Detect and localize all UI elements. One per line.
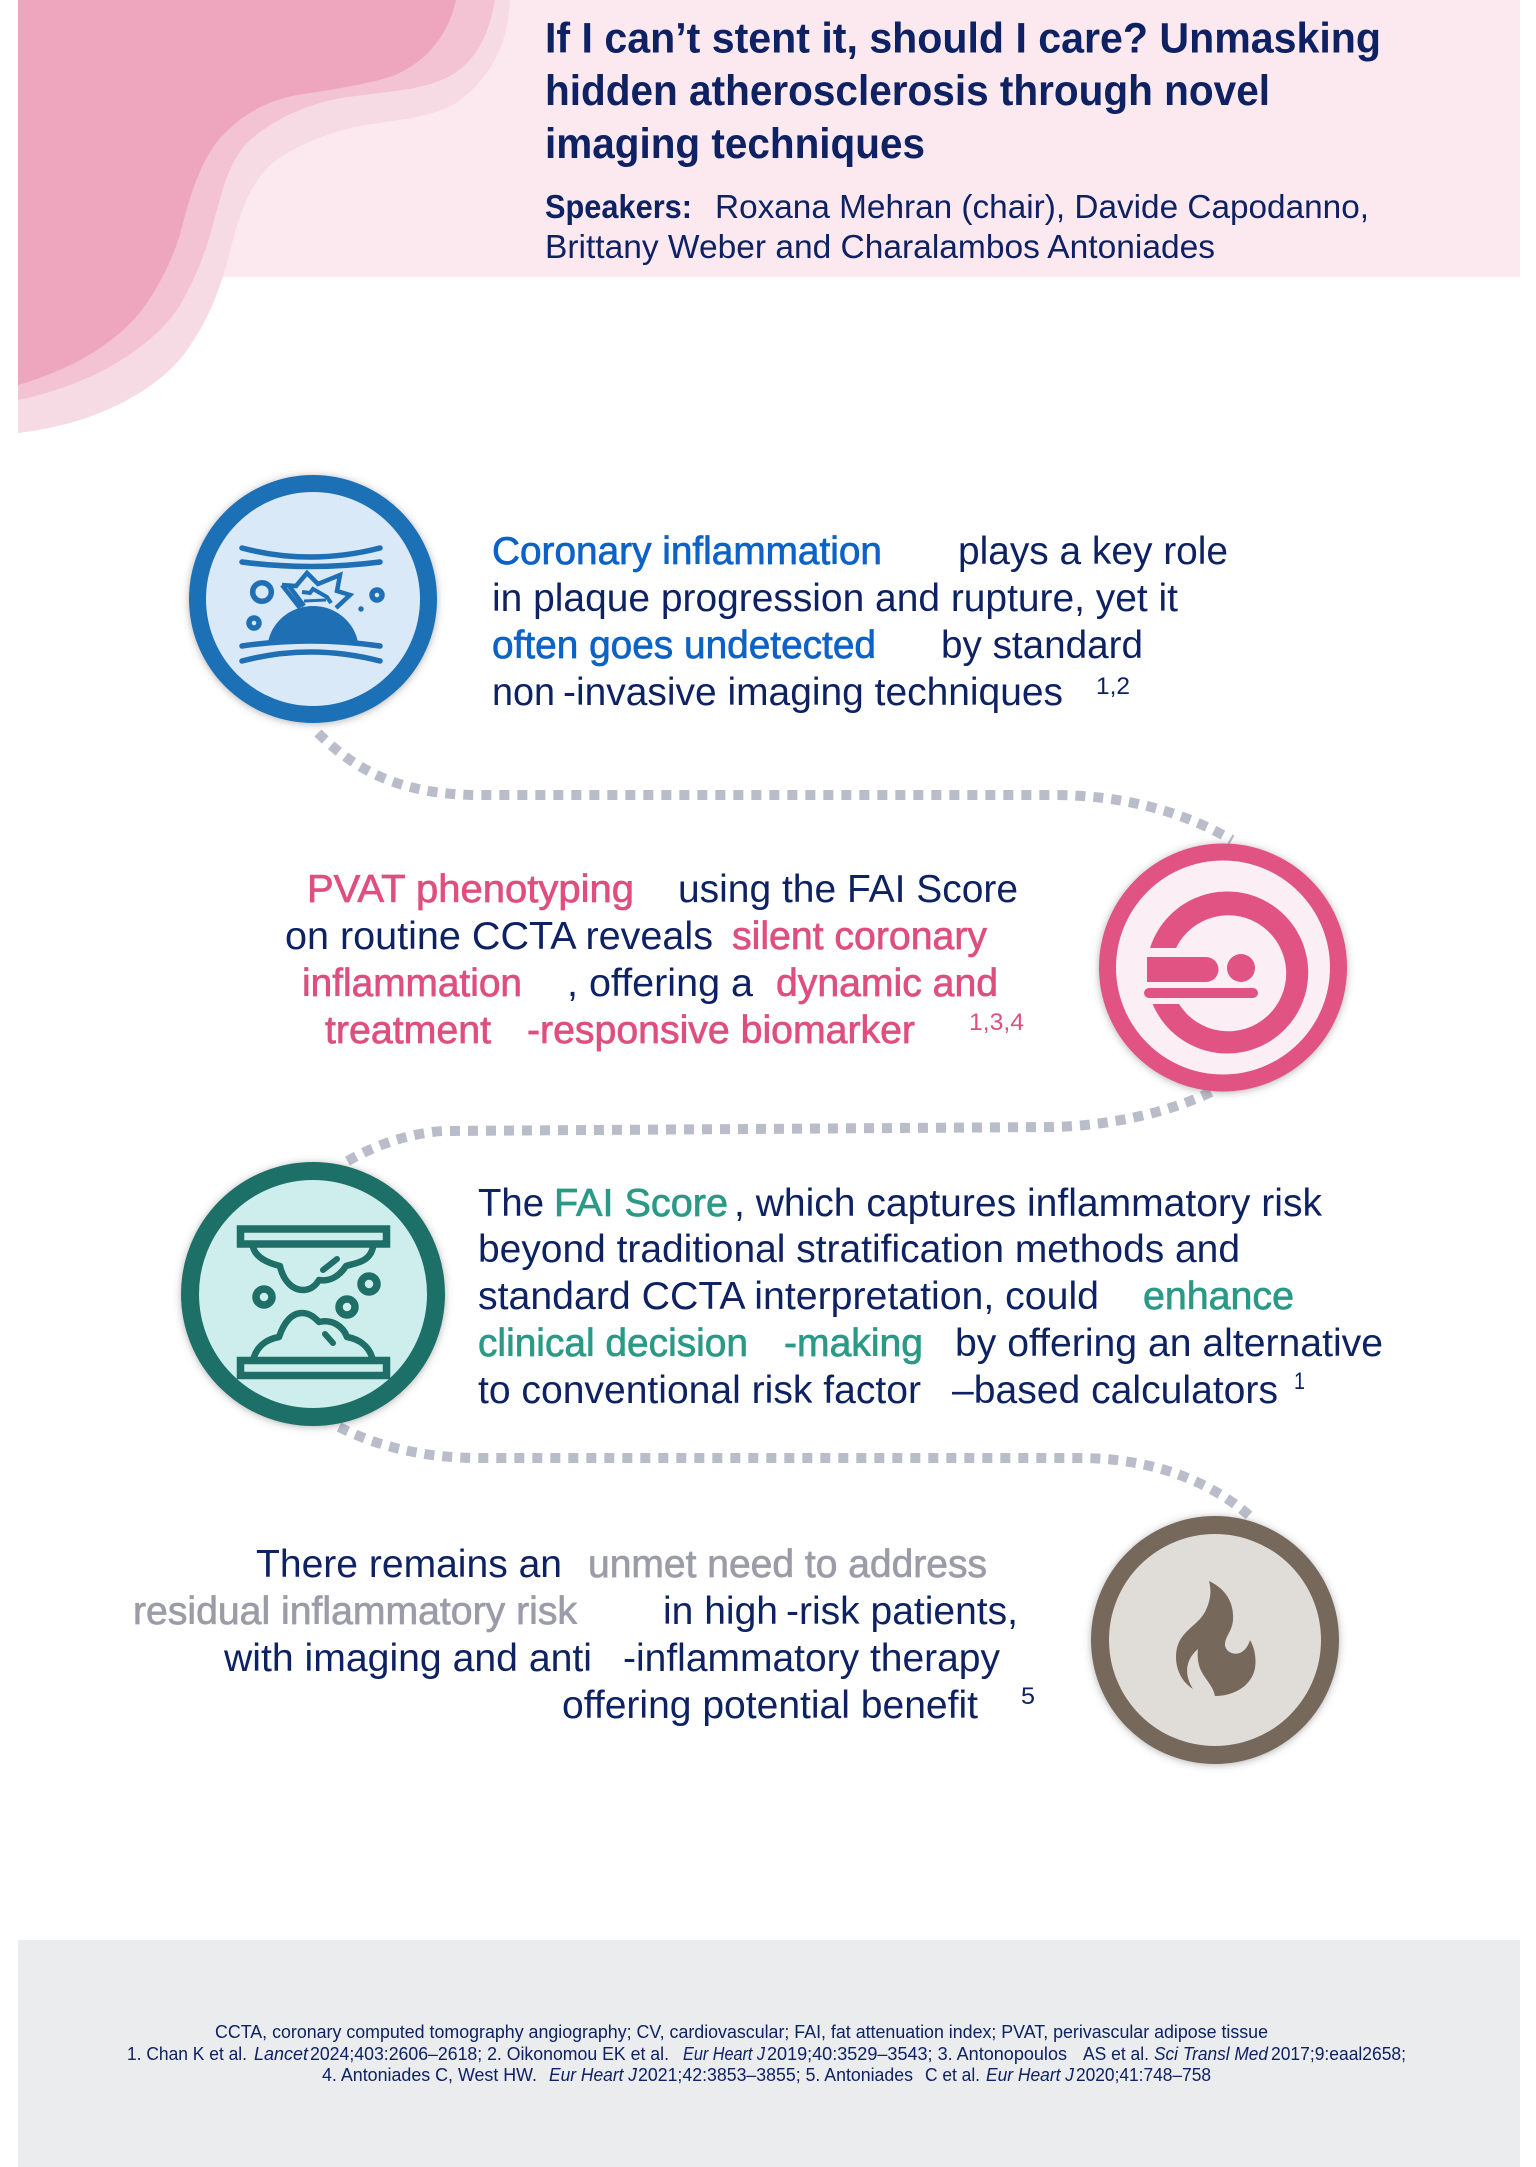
text block: unmet need: -risk patients, — [786, 1590, 1018, 1633]
text block: PVAT phenotyping: 1,3,4 — [969, 1009, 1024, 1036]
text block: unmet need: in high — [663, 1590, 778, 1633]
dashed connector 2 to 3 — [346, 1092, 1211, 1162]
text block: unmet need — [133, 1543, 1035, 1727]
text block: FAI Score: –based calculators — [952, 1369, 1278, 1412]
speakers: Speakers: — [545, 188, 692, 225]
footer abbreviations and references: AS et al. — [1083, 2044, 1149, 2064]
text block: coronary inflammation — [492, 530, 1228, 714]
icon: calcified plaque hourglass — [190, 1171, 436, 1417]
footer abbreviations and references: 2019;40:3529–3543; 3. Antonopoulos — [767, 2044, 1067, 2064]
footer abbreviations and references: 2017;9:eaal2658; — [1271, 2044, 1406, 2064]
text block: unmet need: offering potential benefit — [562, 1684, 978, 1727]
title: imaging techniques — [545, 120, 925, 168]
text block: PVAT phenotyping — [285, 868, 1024, 1052]
dashed connector 1 to 2 — [318, 733, 1232, 840]
text block: unmet need: There remains an — [256, 1543, 562, 1586]
footer abbreviations and references: 1. Chan K et al. — [127, 2044, 247, 2064]
icon: coronary plaque rupture — [198, 484, 428, 714]
icon: CT scanner — [1108, 852, 1338, 1083]
footer abbreviations and references — [127, 2022, 1406, 2085]
text block: FAI Score — [478, 1182, 1383, 1412]
text block: PVAT phenotyping: -responsive biomarker — [527, 1009, 915, 1052]
footer abbreviations and references: Lancet — [254, 2044, 309, 2064]
text block: FAI Score: enhance — [1143, 1275, 1294, 1318]
text block: PVAT phenotyping: treatment — [325, 1009, 491, 1052]
title: hidden atherosclerosis through novel — [545, 67, 1270, 115]
footer abbreviations and references: CCTA, coronary computed tomography angiography; CV, cardiovascular; FAI, fat attenuation index; PVAT, perivascular adipose tissue — [215, 2022, 1268, 2042]
text block: PVAT phenotyping: , offering a — [567, 962, 753, 1005]
footer abbreviations and references: Eur Heart J — [986, 2065, 1075, 2085]
footer abbreviations and references: 2021;42:3853–3855; 5. Antoniades — [638, 2065, 913, 2085]
footer abbreviations and references: Eur Heart J — [549, 2065, 638, 2085]
footer band — [18, 1940, 1520, 2167]
text block: unmet need: residual inflammatory risk — [133, 1590, 577, 1633]
text block: coronary inflammation: non — [492, 671, 555, 714]
decorative pink waves — [18, 0, 510, 433]
footer abbreviations and references: Sci Transl Med — [1154, 2044, 1269, 2064]
speakers: Roxana Mehran (chair), Davide Capodanno, — [715, 188, 1369, 225]
text block: PVAT phenotyping: inflammation — [302, 962, 522, 1005]
text block: coronary inflammation: in plaque progression and rupture, yet it — [492, 577, 1178, 620]
text block: FAI Score: , which captures inflammatory risk — [734, 1182, 1322, 1225]
icon: flame — [1100, 1525, 1330, 1755]
text block: coronary inflammation: Coronary inflammation — [492, 530, 882, 573]
text block: coronary inflammation: often goes undetected — [492, 624, 876, 667]
footer abbreviations and references: 4. Antoniades C, West HW. — [322, 2065, 537, 2085]
text block: FAI Score: 1 — [1294, 1368, 1305, 1395]
header band — [18, 0, 1520, 277]
title — [545, 14, 1381, 168]
text block: PVAT phenotyping: on routine CCTA reveals — [285, 915, 713, 958]
text block: FAI Score: to conventional risk factor — [478, 1369, 921, 1412]
title: If I can’t stent it, should I care? Unmasking — [545, 14, 1381, 62]
text block: coronary inflammation: plays a key role — [958, 530, 1228, 573]
footer abbreviations and references: C et al. — [925, 2065, 980, 2085]
text block: unmet need: -inflammatory therapy — [623, 1637, 1000, 1680]
text block: coronary inflammation: 1,2 — [1096, 673, 1130, 700]
speakers — [545, 188, 1369, 265]
text block: PVAT phenotyping: PVAT phenotyping — [307, 868, 634, 911]
text block: FAI Score: standard CCTA interpretation, could — [478, 1275, 1099, 1318]
text block: coronary inflammation: -invasive imaging techniques — [563, 671, 1063, 714]
text block: FAI Score: by offering an alternative — [955, 1322, 1383, 1365]
text block: unmet need: 5 — [1021, 1683, 1035, 1710]
text block: PVAT phenotyping: silent coronary — [732, 915, 987, 958]
text block: PVAT phenotyping: dynamic and — [776, 962, 998, 1005]
text block: FAI Score: beyond traditional stratification methods and — [478, 1228, 1240, 1271]
text block: FAI Score: The — [478, 1182, 544, 1225]
footer abbreviations and references: Eur Heart J — [683, 2044, 766, 2064]
text block: FAI Score: -making — [784, 1322, 923, 1365]
text block: unmet need: with imaging and anti — [223, 1637, 592, 1680]
dashed connector 3 to 4 — [339, 1427, 1252, 1518]
text block: coronary inflammation: by standard — [941, 624, 1143, 667]
footer abbreviations and references: 2020;41:748–758 — [1076, 2065, 1211, 2085]
text block: FAI Score: clinical decision — [478, 1322, 748, 1365]
text block: unmet need: unmet need to address — [588, 1543, 987, 1586]
text block: PVAT phenotyping: using the FAI Score — [678, 868, 1018, 911]
footer abbreviations and references: 2024;403:2606–2618; 2. Oikonomou EK et al. — [310, 2044, 669, 2064]
speakers: Brittany Weber and Charalambos Antoniades — [545, 228, 1215, 265]
text block: FAI Score: FAI Score — [554, 1182, 728, 1225]
